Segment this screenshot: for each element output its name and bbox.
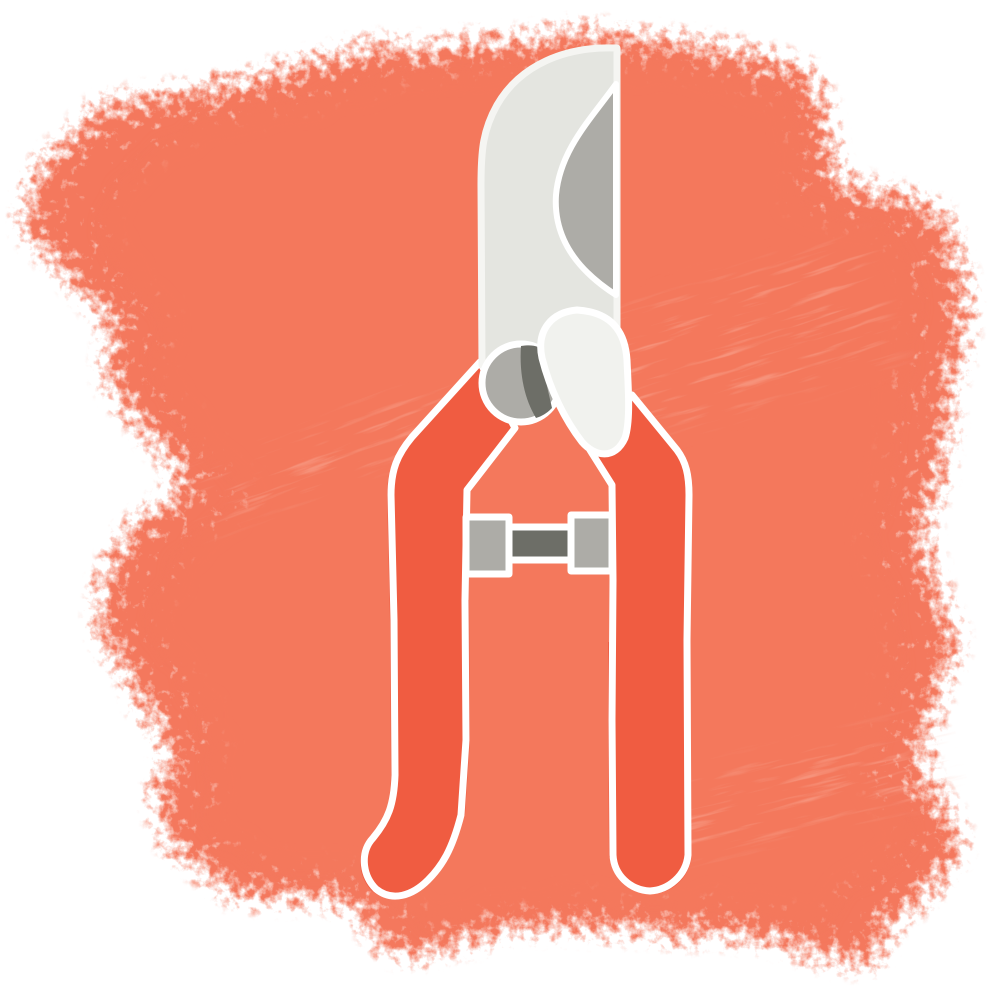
pivot bolt dark band bbox=[521, 345, 552, 418]
blade bbox=[481, 48, 617, 365]
connector left block bbox=[466, 517, 509, 574]
background brush: solid core bbox=[110, 66, 912, 922]
blade cutting edge recess bbox=[556, 84, 616, 295]
connector centre bbox=[508, 527, 572, 560]
right handle bbox=[590, 395, 692, 894]
background brush: pale chalk streaks bbox=[186, 235, 955, 865]
connector right block bbox=[571, 515, 612, 571]
pruning shears bbox=[360, 48, 692, 898]
spring connector bar bbox=[466, 515, 612, 574]
grip knob bbox=[541, 310, 629, 454]
pivot bolt bbox=[482, 344, 560, 422]
left handle bbox=[360, 362, 515, 898]
